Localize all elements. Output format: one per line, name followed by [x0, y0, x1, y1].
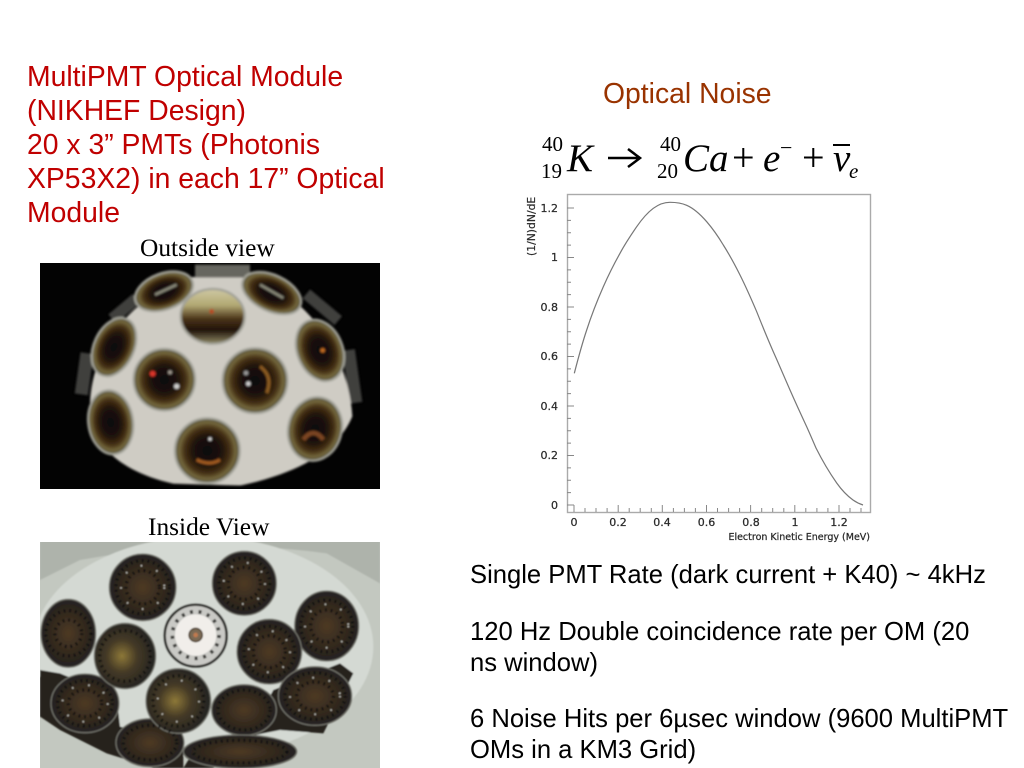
- heading: MultiPMT optical module: [27, 61, 385, 229]
- lenses: [83, 263, 353, 483]
- x axis title: Electron Kinetic Energy (MeV): [728, 532, 870, 543]
- equation: potassium-40 decay: 20: [657, 159, 678, 183]
- x axis labels: 0.8: [742, 516, 760, 529]
- x axis labels: 0.6: [698, 516, 715, 529]
- text: double coincidence rate: 120 Hz Double coincidence rate per OM (20: [470, 618, 969, 646]
- equation: potassium-40 decay: 19: [541, 159, 562, 183]
- text: noise hits: [470, 705, 1008, 764]
- y axis labels: 0: [551, 499, 558, 512]
- heading: optical noise: Optical Noise: [603, 78, 772, 110]
- text: single PMT rate: Single PMT Rate (dark current + K40) ~ 4kHz: [470, 561, 986, 589]
- x axis labels: 0: [570, 516, 578, 529]
- text: double coincidence rate: ns window): [470, 649, 598, 677]
- bright floor: [33, 537, 373, 757]
- x axis labels: 0.4: [653, 516, 671, 529]
- dome: [90, 277, 352, 486]
- x axis labels: [570, 516, 848, 529]
- spectrum curve: [574, 202, 863, 505]
- y axis labels: 1.2: [540, 202, 558, 215]
- text: noise hits: OMs in a KM3 Grid): [470, 736, 696, 764]
- x axis labels: 0.2: [609, 516, 627, 529]
- x axis labels: 1: [792, 516, 798, 529]
- y axis labels: 0.2: [540, 449, 558, 462]
- heading: MultiPMT optical module: XP53X2) in each 17” Optical: [27, 163, 385, 195]
- equation: potassium-40 decay: Ca: [683, 137, 729, 180]
- photo: inside view of optical module: [40, 542, 380, 768]
- highlights: [150, 285, 325, 463]
- equation: potassium-40 decay: e: [849, 159, 858, 183]
- text: noise hits: 6 Noise Hits per 6µsec window (9600 MultiPMT: [470, 705, 1008, 733]
- equation: potassium-40 decay: +: [802, 135, 825, 180]
- y axis labels: 0.8: [540, 301, 558, 314]
- metal glints: [62, 563, 348, 722]
- y axis title: (1/N)dN/dE: [525, 197, 538, 256]
- equation: potassium-40 decay: K: [566, 137, 595, 180]
- equation: potassium-40 decay: 40: [542, 132, 563, 156]
- equation: potassium-40 decay: v: [833, 137, 851, 180]
- equation: potassium-40 decay: −: [780, 135, 792, 160]
- y axis labels: 0.6: [540, 350, 558, 363]
- equation: potassium-40 decay: 40: [660, 132, 681, 156]
- equation: potassium-40 decay: +: [732, 135, 755, 180]
- central silver PMT base: [165, 605, 227, 667]
- heading: MultiPMT optical module: (NIKHEF Design): [27, 95, 246, 127]
- pin rings: [46, 558, 353, 763]
- y axis labels: 1: [551, 251, 558, 264]
- plot frame: [568, 194, 870, 512]
- caption: inside view: Inside View: [148, 513, 269, 541]
- heading: MultiPMT optical module: 20 x 3” PMTs (Photonis: [27, 129, 320, 161]
- heading: MultiPMT optical module: Module: [27, 197, 120, 229]
- upper wall shading: [40, 540, 380, 583]
- caption: outside view: Outside view: [140, 234, 275, 262]
- equation: potassium-40 decay: e: [763, 137, 780, 180]
- photo: outside view of optical module: [40, 263, 380, 489]
- equation: potassium-40 decay: [541, 132, 858, 183]
- y axis labels: [540, 202, 558, 512]
- text: double coincidence rate: [470, 618, 969, 677]
- chart: electron kinetic energy spectrum: [525, 194, 872, 543]
- mounts: [75, 265, 362, 404]
- x axis labels: 1.2: [830, 516, 848, 529]
- y axis labels: 0.4: [540, 400, 558, 413]
- lower crowded tubes: [40, 663, 353, 768]
- heading: MultiPMT optical module: MultiPMT Optical Module: [27, 61, 343, 93]
